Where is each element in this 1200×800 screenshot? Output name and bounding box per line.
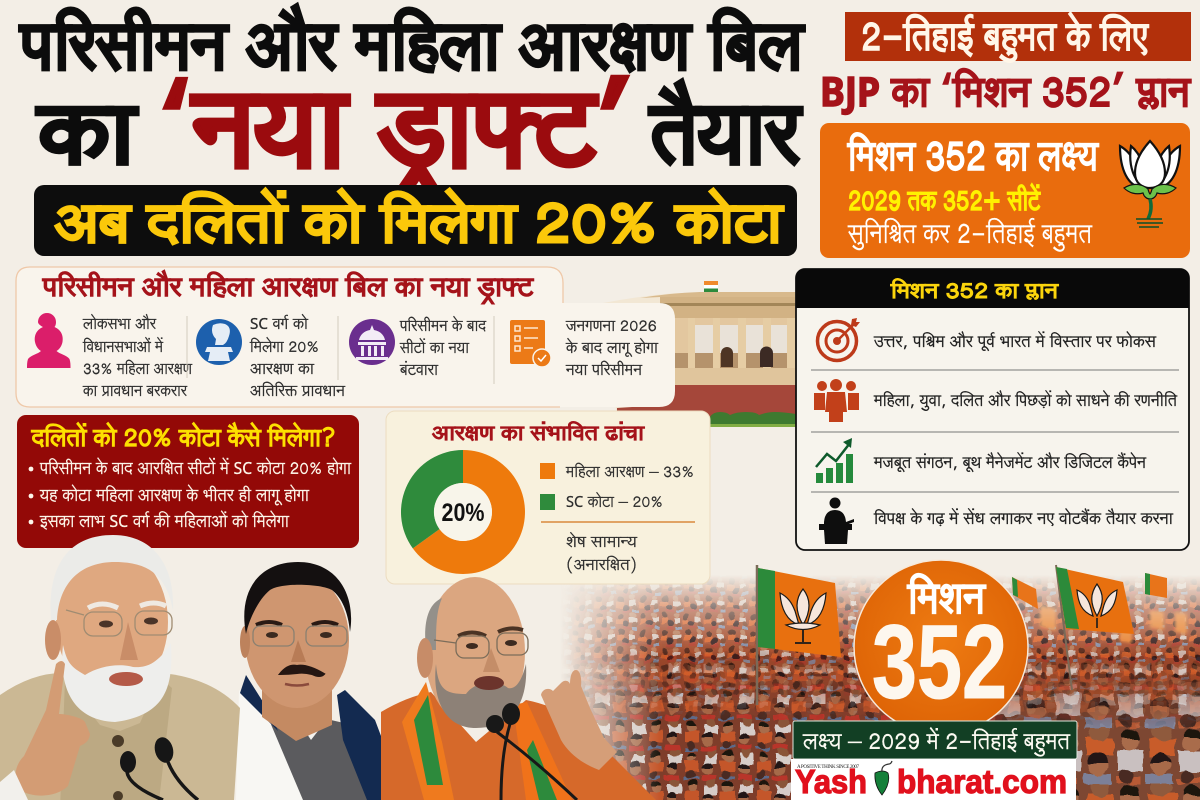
face [425,577,525,727]
logo: Yashbharat: bharat.com [897,763,1067,800]
target caption bar: लक्ष्य – 2029 में 2-तिहाई बहुमत [802,726,1071,761]
bullet list: परिसीमन के बाद आरक्षित सीटों में SC कोटा 20% होगा [39,457,352,483]
panel: how dalits get 20 percent quota: दलितों को 20% कोटा कैसे मिलेगा? [31,421,336,459]
legend: शेष सामान्य [566,531,637,555]
blue scarf [240,675,405,800]
portrait: Nadda [236,562,452,800]
panel heading: परिसीमन और महिला आरक्षण बिल का नया ड्राफ्ट [42,269,535,310]
item 3: redistribution [349,315,487,383]
plan row 1: उत्तर, पश्चिम और पूर्व भारत में विस्तार पर फोकस [873,330,1157,356]
hair [51,535,173,620]
item 2: SC reservation: मिलेगा 20% [249,336,319,360]
lotus symbol [780,589,826,643]
beard [435,664,526,728]
bullet list: यह कोटा महिला आरक्षण के भीतर ही लागू होगा [39,484,310,510]
grey vest [269,715,412,800]
heading bar: two-thirds majority: 2-तिहाई बहुमत के लिए [861,9,1150,70]
logo: Yashbharat: Yash [795,763,867,800]
panel: how dalits get 20 percent quota [17,415,359,548]
small distant flags [1012,573,1167,609]
item 4: census: नया परिसीमन [565,359,642,383]
title line 2: का [36,72,139,206]
plan row 3 [816,438,1147,483]
title line 2: तैयार [648,72,803,206]
panel: new draft [16,267,675,407]
panel: mission 352 goal [820,123,1190,258]
portrait: Modi [0,535,240,800]
item 4: census: के बाद लागू होगा [565,337,659,361]
icon: purple circle [349,319,395,365]
bullet list [29,457,352,536]
icon: mouse [875,761,892,795]
plan row 3: मजबूत संगठन, बूथ मैनेजमेंट और डिजिटल कैंपेन [873,451,1147,477]
legend: (अनारक्षित) [566,554,637,578]
plan row 1 [818,318,1157,360]
item 1: women reservation: का प्रावधान बरकरार [82,380,188,404]
item 2: SC reservation [196,313,345,404]
item 4: census [510,315,659,383]
face [56,548,168,696]
title line 1: परिसीमन और महिला आरक्षण बिल [19,0,805,102]
icon: blue circle [196,319,242,365]
lotus symbol [1077,584,1117,628]
microphones [486,703,577,800]
donut chart: 20% [442,499,484,527]
title line 2: ‘नया ड्राफ्ट’ [157,51,635,220]
legend: महिला आरक्षण – 33% [565,461,694,485]
icon: clipboard [510,320,545,364]
flag right [1056,565,1134,690]
panel: mission 352 plan [796,269,1189,550]
logo: Yashbharat [791,759,1076,800]
icon: lotus [1120,141,1180,227]
panel: likely reservation structure: आरक्षण का संभावित ढांचा [432,419,645,451]
beige kurta [0,673,240,800]
indian flag [704,281,718,292]
panel: likely reservation structure [386,411,710,584]
item 2: SC reservation: आरक्षण का [250,358,315,382]
stoles [402,682,454,800]
item 4: census: जनगणना 2026 [565,315,657,339]
item 3: redistribution: बंटवारा [399,359,439,383]
item 3: redistribution: सीटों का नया [399,337,470,361]
legend [540,461,695,578]
mission 352 badge: 352 [872,604,1007,721]
title line 2 [36,51,803,220]
portrait: Shah [381,577,656,800]
open hand [541,670,617,770]
panel: mission 352 goal: 2029 तक 352+ सीटें [848,180,1041,224]
black quota banner: अब दलितों को मिलेगा 20% कोटा [55,184,784,270]
bullet list: इसका लाभ SC वर्ग की महिलाओं को मिलेगा [39,510,290,536]
panel: mission 352 goal: सुनिश्चित कर 2-तिहाई बहुमत [847,213,1093,257]
beard [62,643,171,722]
donut chart [401,450,525,574]
crowd photo background [564,578,1200,800]
legend: SC कोटा – 20% [566,491,663,515]
plan row 2: महिला, युवा, दलित और पिछड़ों को साधने की रणनीति [873,389,1177,415]
white shawl [236,690,303,800]
raised hand [16,661,90,796]
logo: Yashbharat: A POSITIVE THINK SINCE 2007 [797,765,860,770]
item 1: women reservation: 33% महिला आरक्षण [83,358,192,382]
panel: mission 352 goal: मिशन 352 का लक्ष्य [846,127,1099,191]
plan row 4: विपक्ष के गढ़ में सेंध लगाकर नए वोटबैंक तैयार करना [873,507,1174,533]
item 1: women reservation: विधानसभाओं में [82,336,163,360]
item 1: women reservation: लोकसभा और [82,313,157,337]
parliament building photo [603,281,796,427]
plan row 2 [814,379,1177,422]
panel: mission 352 plan: मिशन 352 का प्लान [890,275,1059,309]
microphones [120,735,198,800]
flag left [757,565,841,705]
mission 352 badge: मिशन [906,568,987,635]
item 2: SC reservation: SC वर्ग को [250,313,309,337]
item 1: women reservation [27,313,192,404]
item 2: SC reservation: अतिरिक्त प्रावधान [250,380,345,404]
icon: woman [27,313,70,368]
orange kurta [381,692,656,800]
white kurta right [400,725,452,800]
plan row 4 [819,498,1174,544]
mission 352 badge [854,560,1028,734]
item 3: redistribution: परिसीमन के बाद [399,315,487,339]
